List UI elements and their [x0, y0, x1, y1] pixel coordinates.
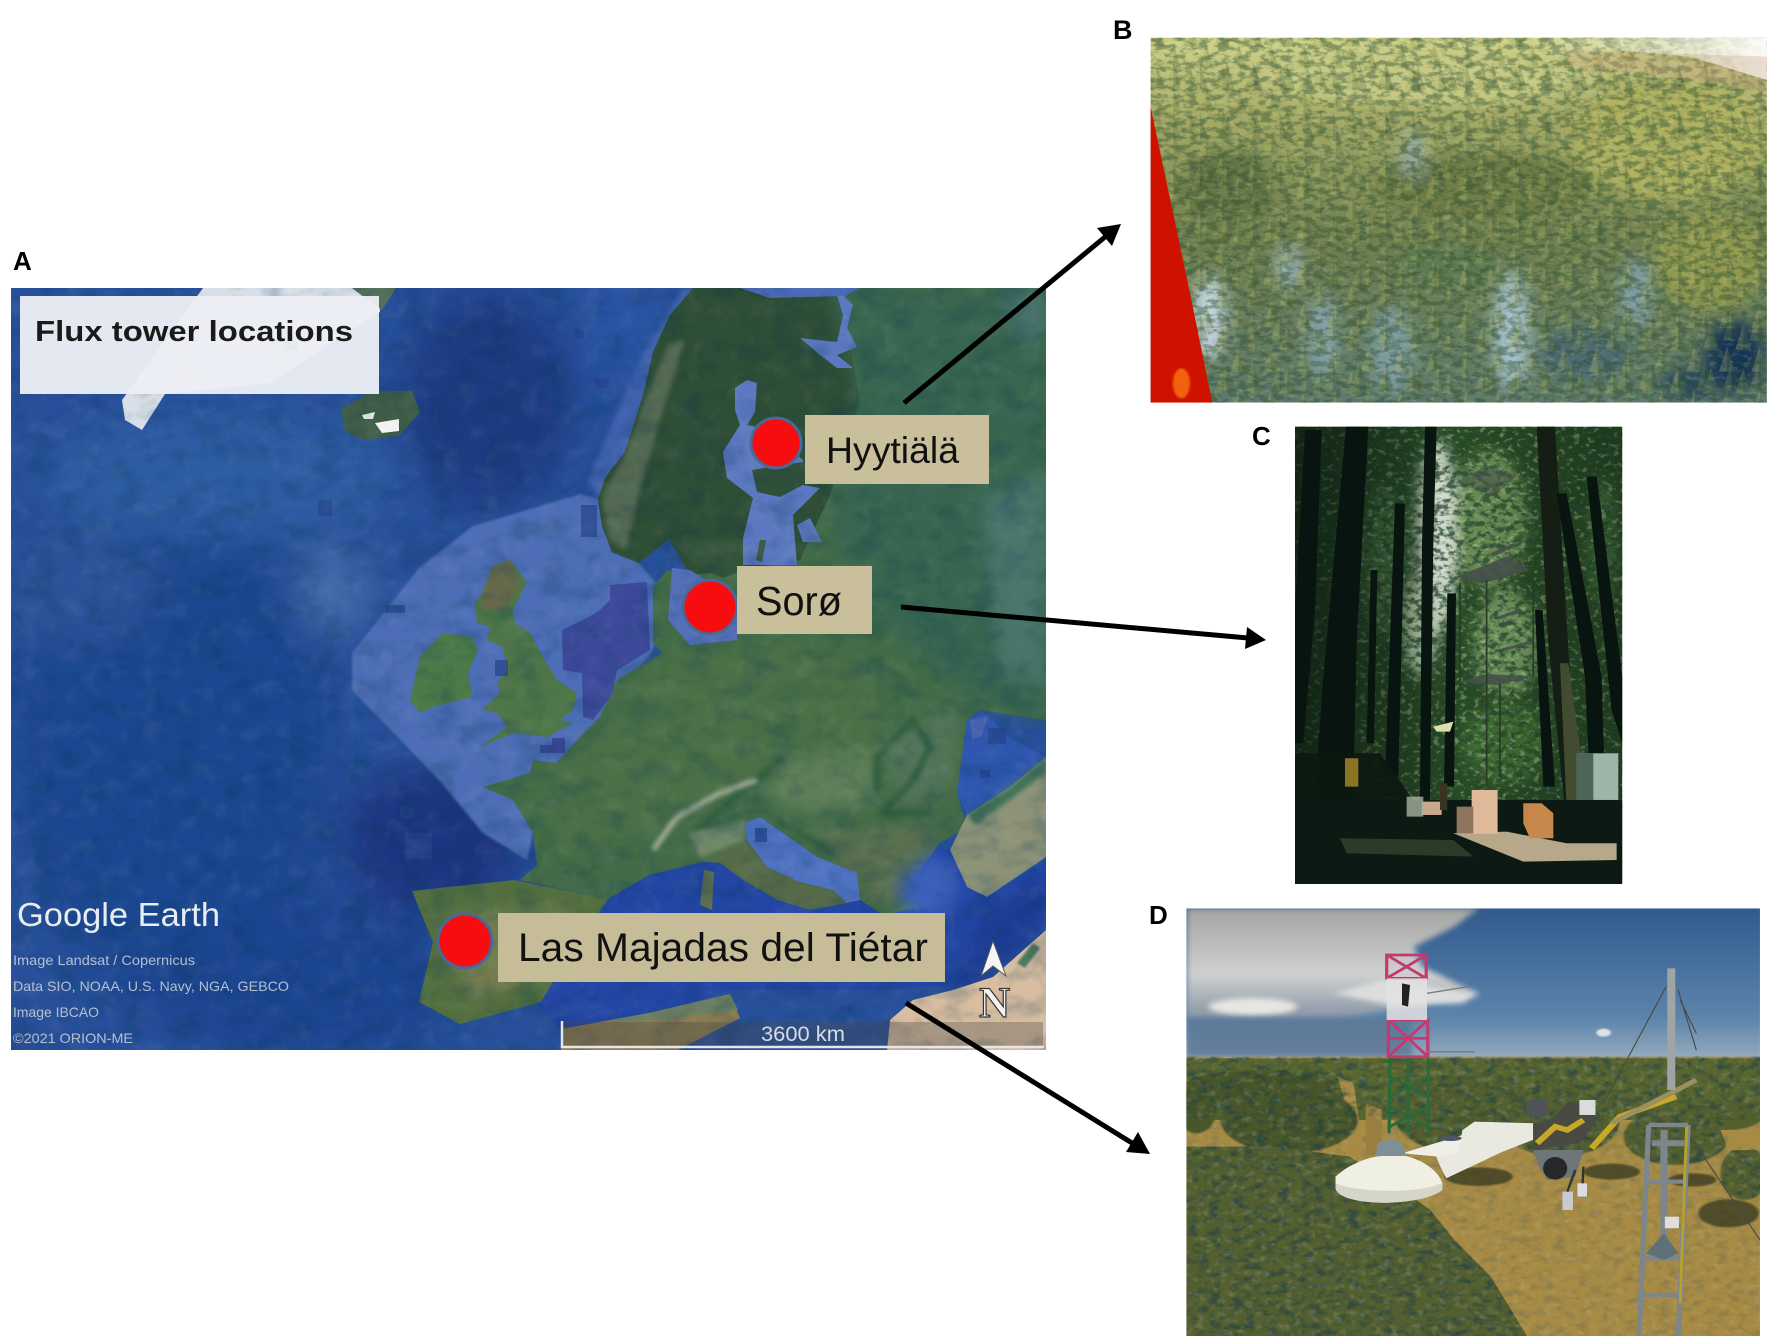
ocean shelf [352, 494, 669, 860]
scale band [561, 1022, 1043, 1046]
photo C: beech forest with scaffold tower [1295, 427, 1622, 884]
Ireland [410, 633, 478, 713]
marker and label: Las Majadas del Tiétar [438, 913, 945, 982]
imagery credits: Data SIO, NOAA, U.S. Navy, NGA, GEBCO [13, 978, 289, 994]
Sardinia, Corsica and Sicily [700, 870, 714, 910]
scattered bathymetry tiles [284, 330, 1006, 1011]
Alps [653, 780, 757, 850]
panel: map of flux tower locations [0, 280, 1046, 1060]
White Sea [800, 292, 857, 368]
title label: Flux tower locations: Flux tower locations [35, 316, 353, 348]
mast with guy wires [1604, 968, 1760, 1240]
dark North Sea block [562, 582, 650, 720]
Barents coast [740, 288, 860, 298]
Gotland [756, 540, 766, 562]
clouds [1186, 908, 1479, 1018]
icon: north arrow: N [979, 980, 1010, 1027]
scale bar 3600 km [562, 1021, 1044, 1047]
Sweden south tip [669, 538, 743, 578]
Norway mountains [602, 340, 685, 550]
Baltic Sea [723, 380, 820, 565]
Norwegian coast shelf [588, 288, 692, 498]
canopy texture [1186, 1057, 1760, 1336]
yellow cables [1537, 1097, 1676, 1148]
dark understory [1295, 800, 1622, 884]
foreground oak canopy [1186, 1147, 1527, 1336]
mid-ground oak canopy [1176, 1070, 1358, 1153]
scale bar 3600 km: 3600 km [761, 1023, 845, 1046]
horizon trees [1186, 1058, 1760, 1120]
shed [1577, 753, 1618, 803]
Algeria and Tunisia coast [561, 994, 740, 1051]
icon: north arrow [979, 941, 1010, 1027]
Italy [700, 840, 847, 910]
Google Earth logo: Google Earth [17, 896, 220, 933]
Russia [830, 288, 1046, 720]
marker and label: Hyytiälä: Hyytiälä [826, 430, 959, 471]
Po valley [690, 820, 747, 858]
marker and label: Las Majadas del Tiétar: Las Majadas del Tiétar [518, 926, 928, 970]
red and white tower section [1387, 955, 1428, 1057]
metal lattice tower [1639, 1125, 1688, 1336]
photo B: aerial pine forest [1151, 38, 1769, 403]
Turkey [950, 757, 1046, 897]
Gulf of Riga [797, 518, 822, 542]
Mediterranean Sea [520, 843, 1046, 1030]
radiometer base [1336, 1156, 1442, 1203]
scaffold platforms [1457, 465, 1533, 685]
tree shadows [1444, 1164, 1759, 1227]
map texture [11, 288, 1046, 1050]
field ground [1186, 1057, 1760, 1337]
ocean base [11, 288, 1046, 1050]
imagery credits [13, 952, 289, 1046]
imagery credits: Image Landsat / Copernicus [13, 952, 195, 968]
panel label C: C [1252, 421, 1271, 451]
marker and label: Sorø [683, 566, 872, 634]
Greenland [122, 288, 380, 430]
yellow sign [1345, 758, 1358, 787]
sensor block [1533, 1103, 1596, 1150]
imagery credits: ©2021 ORION-ME [13, 1030, 133, 1046]
Great Britain [475, 560, 577, 747]
Central Europe [552, 650, 870, 845]
Morocco and Sahara [887, 930, 1046, 1051]
Azov and Black Sea [957, 710, 1046, 815]
arrow to photo B [904, 224, 1121, 403]
orange-red aircraft strut [1151, 107, 1212, 403]
panel label B: B [1113, 15, 1132, 45]
sunlit ground [1453, 832, 1617, 862]
tree trunks [1295, 427, 1622, 860]
faded canopy edge [1529, 38, 1767, 80]
continental land [483, 288, 1046, 915]
title label: Flux tower locations [20, 296, 379, 394]
Adriatic [745, 817, 860, 903]
equipment boxes [1472, 790, 1498, 834]
panel label A: A [13, 246, 32, 276]
Iceland [341, 391, 420, 440]
dome sensor [1376, 1138, 1406, 1155]
arrow to photo C [901, 607, 1266, 649]
Hungarian plain and Ukraine steppe [770, 750, 880, 815]
Danish straits [668, 568, 737, 645]
photo D: dehesa site with radiometer and towers [1176, 908, 1769, 1337]
green tower section [1389, 1058, 1428, 1133]
imagery credits: Image IBCAO [13, 1004, 99, 1020]
arrow to photo D [906, 1003, 1150, 1154]
marker and label: Hyytiälä [751, 415, 989, 484]
Carpathians and Dinaric ranges [700, 720, 933, 853]
Balkans [816, 824, 932, 904]
Iberia [412, 880, 608, 1024]
hanging sensors [1562, 1167, 1587, 1210]
marker and label: Sorø: Sorø [756, 578, 842, 624]
field paths between trees [1338, 1077, 1364, 1157]
panel label D: D [1149, 900, 1168, 930]
radiometer arm [1436, 1122, 1537, 1178]
Scandinavia and Finland [598, 288, 860, 575]
